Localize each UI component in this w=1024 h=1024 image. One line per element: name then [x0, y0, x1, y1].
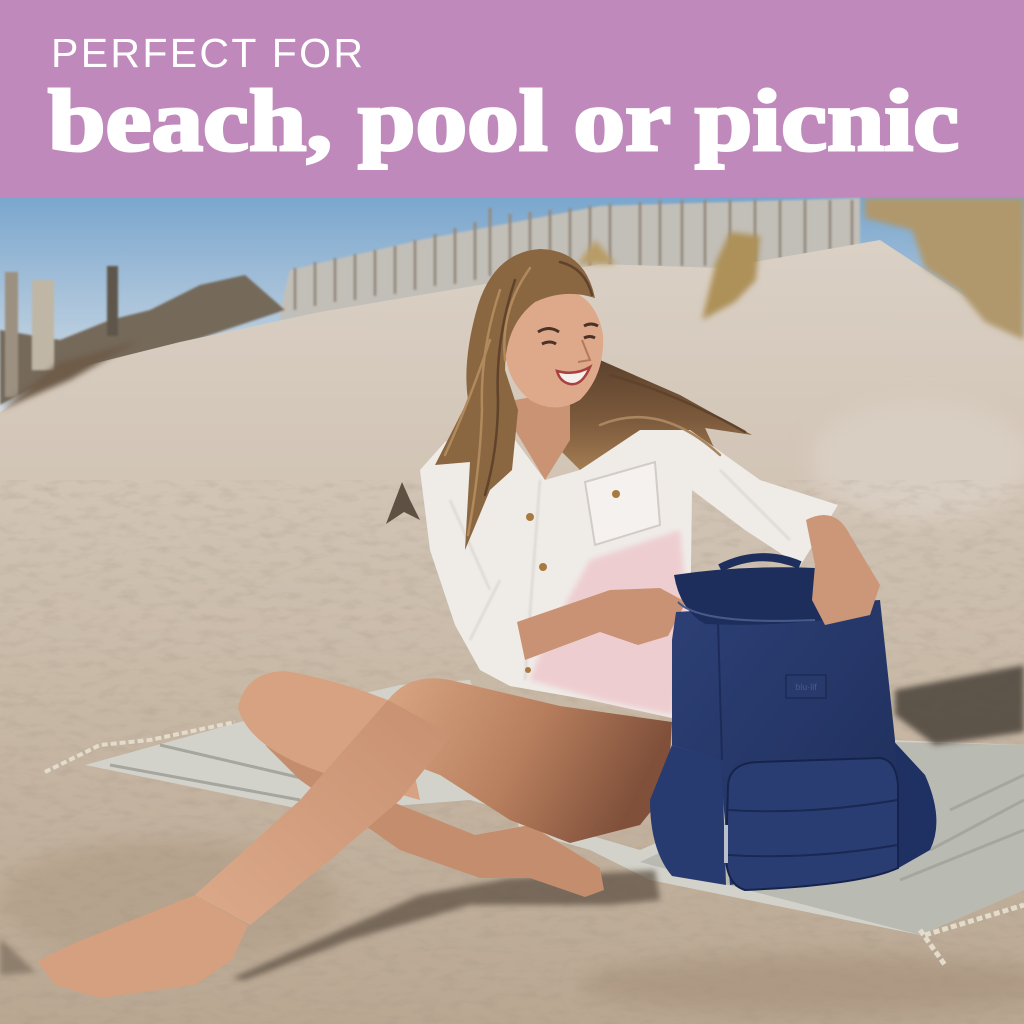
hair top and left side — [435, 249, 595, 550]
sand shading — [0, 400, 1024, 1015]
eyebrow heading: PERFECT FOR — [51, 30, 363, 76]
pink reflection on shirt — [530, 530, 690, 715]
logo patch: blu·lif — [795, 682, 817, 692]
beach blanket — [45, 680, 1024, 965]
front puffer pocket — [726, 758, 898, 890]
lid — [674, 567, 825, 625]
far thigh — [238, 671, 420, 800]
shirt — [420, 420, 838, 718]
sand — [0, 240, 1024, 1024]
navy backpack — [650, 557, 936, 890]
fence along the dune — [0, 198, 860, 405]
left forearm — [517, 588, 686, 660]
nose — [578, 340, 590, 362]
sky — [0, 197, 1024, 427]
woman — [38, 249, 838, 998]
near foot — [38, 895, 248, 998]
bag body — [672, 600, 900, 885]
blanket stripes — [110, 745, 1024, 880]
pocket quilt lines — [728, 800, 897, 856]
cast shadows — [0, 665, 1024, 980]
logo patch — [786, 675, 826, 698]
top handle — [720, 557, 800, 568]
near shin — [195, 700, 452, 925]
neck — [515, 390, 570, 480]
hair behind shoulders — [560, 360, 752, 470]
body seam — [718, 622, 722, 760]
smile — [557, 367, 590, 384]
eyes and brows — [538, 324, 598, 344]
hair strands — [445, 262, 745, 535]
face — [505, 288, 603, 408]
near thigh and hip — [388, 678, 672, 843]
shirt buttons — [525, 490, 620, 673]
zipper — [678, 602, 815, 621]
sand grain texture — [0, 480, 1024, 1024]
far leg shin and foot — [265, 745, 604, 897]
right side pocket — [888, 735, 936, 870]
right arm and hand on bag — [806, 515, 880, 625]
shirt pocket — [585, 462, 660, 545]
banner — [0, 0, 1024, 197]
dune grass — [0, 198, 1024, 410]
main heading: beach, pool or picnic — [48, 73, 959, 170]
seaweed — [386, 482, 420, 524]
shirt folds — [450, 470, 790, 680]
left side pocket — [650, 745, 726, 885]
zipper pull — [724, 825, 728, 863]
